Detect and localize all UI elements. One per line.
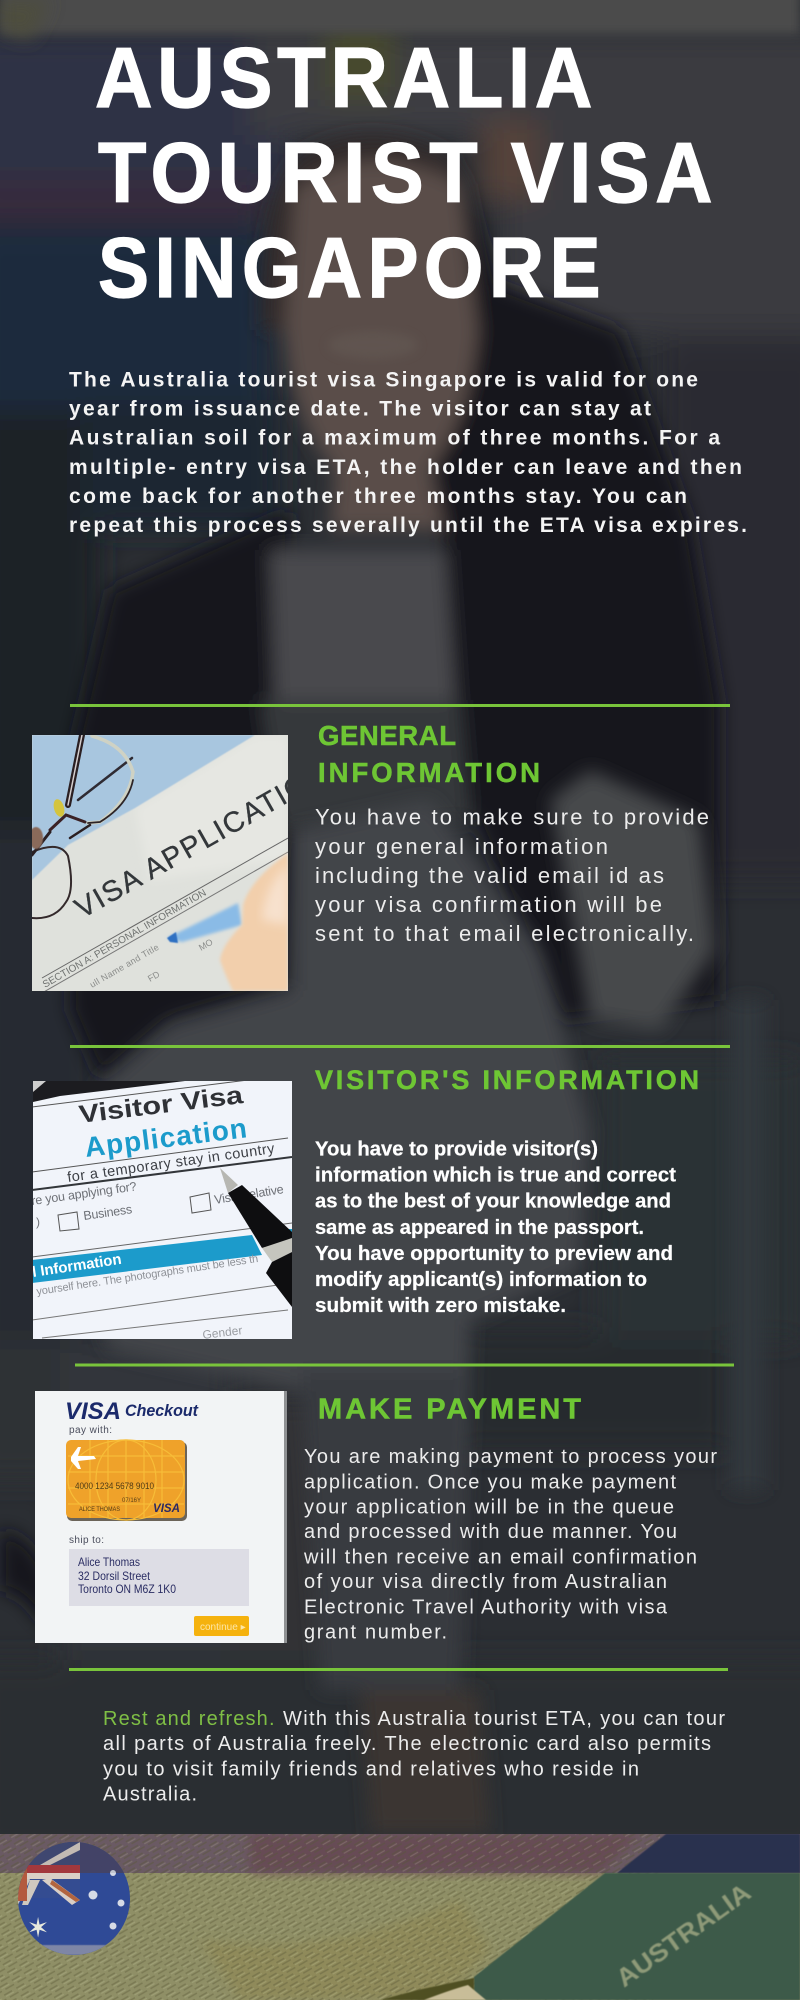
title: AUSTRALIA xyxy=(95,31,597,126)
text: visitor's information: You have opportunity to preview and xyxy=(315,1243,673,1265)
logo: visa checkout: Checkout xyxy=(125,1401,199,1420)
image: visa checkout screen xyxy=(35,1391,287,1643)
image: visitor visa application form with pen: l Information xyxy=(31,1251,123,1281)
closing text: rest and refresh: Rest and refresh. xyxy=(103,1708,274,1730)
address box xyxy=(69,1549,249,1606)
credit card: 4000 1234 5678 9010 xyxy=(75,1481,154,1492)
text: visitor's information: You have to provide visitor(s) xyxy=(315,1138,598,1160)
logo: visa checkout: VISA xyxy=(65,1398,121,1425)
image: visa application form with glasses: ull Name and Title xyxy=(88,942,161,990)
text: visitor's information: same as appeared in the passport. xyxy=(315,1217,644,1239)
image: visitor visa application form with pen xyxy=(30,1075,292,1342)
text: visitor's information: as to the best of your knowledge and xyxy=(315,1191,671,1213)
closing text: rest and refresh xyxy=(103,1708,725,1805)
credit card: ALICE THOMAS xyxy=(79,1506,121,1513)
text: general information: your general information xyxy=(315,834,608,859)
icon: australian flag circle xyxy=(18,1842,130,1955)
title: SINGAPORE xyxy=(98,221,606,316)
divider: top of make payment xyxy=(75,1364,734,1366)
bottom photo: fabric with flag and passport xyxy=(0,1834,800,2000)
credit card: VISA xyxy=(153,1501,180,1515)
divider: above closing text xyxy=(69,1668,728,1671)
heading: general information: GENERAL xyxy=(318,720,456,751)
image: visitor visa application form with pen: Application xyxy=(83,1112,249,1163)
text: visitor's information: submit with zero mistake. xyxy=(315,1295,566,1317)
dim band across top of photo xyxy=(0,1834,664,1873)
image: visa checkout screen: pay with: xyxy=(69,1425,112,1436)
big sleeve xyxy=(60,800,590,1690)
divider: top of general information xyxy=(70,704,730,707)
panel: make payment xyxy=(35,1391,287,1643)
credit card: 07/16Y xyxy=(122,1498,141,1504)
image: visitor visa application form with pen: for a temporary stay in country xyxy=(66,1141,276,1186)
divider: top of visitor information xyxy=(70,1045,730,1048)
heading: visitor's information: VISITOR'S INFORMATION xyxy=(315,1065,699,1095)
closing text: rest and refresh: With this Australia tourist ETA, you can tour xyxy=(283,1708,725,1730)
credit card xyxy=(66,1440,187,1521)
text: general information: You have to make sure to provide xyxy=(315,805,709,830)
continue button: continue ▸ xyxy=(200,1622,246,1633)
text: general information: including the valid email id as xyxy=(315,863,664,888)
image: visa application form with glasses: SECTION A: PERSONAL INFORMATION xyxy=(41,888,208,991)
image: visitor visa application form with pen: ) xyxy=(36,1215,40,1229)
closing text: rest and refresh: Australia. xyxy=(103,1783,197,1805)
panel: visitor information xyxy=(30,1075,292,1342)
logo: visa checkout xyxy=(65,1398,199,1425)
title xyxy=(95,31,718,316)
passport xyxy=(380,1834,800,2000)
image: visitor visa application form with pen: re you applying for? xyxy=(30,1179,137,1208)
text: general information: sent to that email electronically. xyxy=(315,921,694,946)
text: make payment: will then receive an email confirmation xyxy=(303,1546,697,1568)
image: visa application form with glasses: VISA APPLICATIO xyxy=(70,768,313,925)
image: visitor visa application form with pen: Visa Relative xyxy=(213,1182,285,1207)
text: visitor's information: information which is true and correct xyxy=(315,1165,676,1187)
continue button xyxy=(194,1616,249,1636)
text: make payment xyxy=(303,1446,717,1643)
pen xyxy=(167,903,242,942)
image: visitor visa application form with pen: yourself here. The photographs must be less th xyxy=(36,1253,259,1298)
heading: general information xyxy=(318,720,540,788)
intro paragraph: The Australia tourist visa Singapore is valid for one xyxy=(69,368,698,392)
passport: AUSTRALIA xyxy=(611,1878,756,1993)
text: make payment: and processed with due manner. You xyxy=(304,1521,677,1543)
closing text: rest and refresh: you to visit family friends and relatives who reside in xyxy=(103,1759,639,1781)
address box: Alice Thomas xyxy=(78,1555,140,1569)
intro paragraph: come back for another three months stay. You can xyxy=(69,485,687,508)
text: visitor's information: modify applicant(s) information to xyxy=(315,1269,647,1291)
image: visa application form with glasses xyxy=(32,735,288,991)
address box: 32 Dorsil Street xyxy=(78,1569,151,1583)
pen xyxy=(220,1168,292,1307)
image: visitor visa application form with pen: Visitor Visa xyxy=(77,1081,246,1129)
intro paragraph: multiple- entry visa ETA, the holder can leave and then xyxy=(69,456,742,479)
panel: general information xyxy=(32,735,288,991)
text: make payment: your application will be in the queue xyxy=(304,1496,674,1518)
heading: make payment: MAKE PAYMENT xyxy=(318,1394,581,1426)
text: make payment: You are making payment to process your xyxy=(304,1446,717,1468)
intro paragraph: Australian soil for a maximum of three months. For a xyxy=(69,427,720,450)
closing text: rest and refresh: all parts of Australia freely. The electronic card also permits xyxy=(103,1733,711,1755)
text: make payment: application. Once you make payment xyxy=(304,1472,676,1494)
intro paragraph xyxy=(69,368,747,537)
text: make payment: of your visa directly from Australian xyxy=(304,1571,667,1593)
intro paragraph: repeat this process severally until the ETA visa expires. xyxy=(69,514,747,537)
image: visitor visa application form with pen: Business xyxy=(82,1202,133,1223)
title: TOURIST VISA xyxy=(98,126,718,221)
icon: australian flag circle: ✶ xyxy=(27,1913,49,1943)
image: visitor visa application form with pen: Gender xyxy=(202,1323,243,1342)
text: make payment: Electronic Travel Authority with visa xyxy=(304,1597,668,1619)
image: visa checkout screen: ship to: xyxy=(69,1535,104,1546)
image: visa application form with glasses: FD xyxy=(146,969,162,984)
fabric xyxy=(0,1834,800,2000)
text: visitor's information xyxy=(315,1138,676,1317)
address box: Toronto ON M6Z 1K0 xyxy=(78,1582,176,1596)
image: visa application form with glasses: MO xyxy=(197,937,215,953)
text: general information: your visa confirmation will be xyxy=(315,892,662,917)
glasses xyxy=(32,735,133,918)
intro paragraph: year from issuance date. The visitor can stay at xyxy=(69,398,651,421)
text: general information xyxy=(315,805,709,946)
text: make payment: grant number. xyxy=(304,1621,447,1643)
hand xyxy=(220,853,288,991)
heading: general information: INFORMATION xyxy=(318,757,540,788)
